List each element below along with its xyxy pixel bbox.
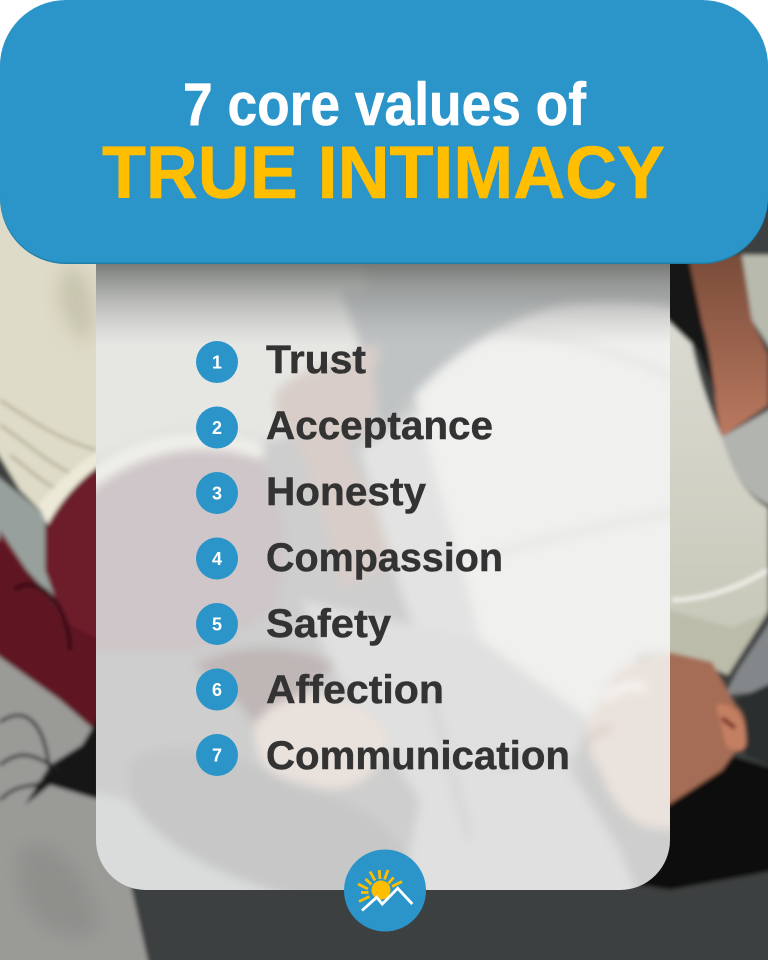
item 2: Acceptance: 2: [212, 418, 222, 438]
item 1: Trust: Trust: [266, 338, 366, 382]
item 6: Affection: Affection: [266, 668, 444, 712]
panel photo: lighter lower left: [96, 794, 266, 890]
item 6: Affection: [196, 668, 444, 712]
photo: grey pillow at right: [725, 610, 768, 695]
numbered list of values: [196, 338, 570, 778]
item 1: Trust: 1: [212, 352, 222, 372]
item 5: Safety: [196, 602, 392, 646]
photo: woman's hair on the carpet: [25, 715, 100, 805]
panel photo: white sleeve: [360, 414, 479, 639]
panel photo: cream top seen through the panel: [96, 284, 362, 462]
item 3: Honesty: [196, 470, 427, 514]
panel photo: woman's face: [254, 694, 386, 789]
panel photo: woman's hair: [130, 748, 420, 900]
panel photo: grey sheet: [343, 290, 527, 422]
item 3: Honesty: 3: [212, 484, 222, 504]
item 4: Compassion: Compassion: [266, 536, 503, 580]
photo: man's sleeve: [722, 405, 768, 508]
title line 1: 7 core values of: [183, 71, 587, 138]
item 6: Affection: 6: [212, 680, 222, 700]
photo: woman's cream top: [0, 190, 110, 515]
photo: red sweater: [0, 465, 100, 735]
photo: man's arm: [685, 255, 768, 437]
item 2: Acceptance: Acceptance: [266, 404, 493, 448]
panel photo: man's face: [585, 650, 670, 832]
panel photo: cuff: [96, 428, 268, 491]
photo: hair: [610, 755, 768, 890]
panel photo: woman's hand: [195, 648, 335, 725]
panel photo: man's shirt: [415, 302, 700, 720]
panel photo: woman's hand and arm: [273, 344, 387, 582]
item 7: Communication: Communication: [266, 734, 570, 778]
item 5: Safety: 5: [212, 614, 222, 634]
item 7: Communication: 7: [212, 746, 222, 766]
logo: sun over mountains: [344, 850, 426, 932]
header banner: [0, 0, 768, 264]
panel photo: red sleeve: [80, 449, 284, 650]
photo: cuff: [38, 450, 100, 530]
item 5: Safety: Safety: [266, 602, 392, 646]
photo: grey gap behind arm: [0, 470, 58, 600]
item 4: Compassion: 4: [212, 549, 222, 569]
title line 2: TRUE INTIMACY: [102, 131, 665, 214]
translucent list panel: [96, 264, 670, 890]
panel photo: fabric lower centre: [300, 600, 640, 900]
photo: carpet: [0, 640, 150, 960]
photo: man's white shirt: [660, 300, 768, 670]
item 3: Honesty: Honesty: [266, 470, 427, 514]
item 1: Trust: [196, 338, 366, 383]
photo: man's face: [660, 650, 746, 805]
